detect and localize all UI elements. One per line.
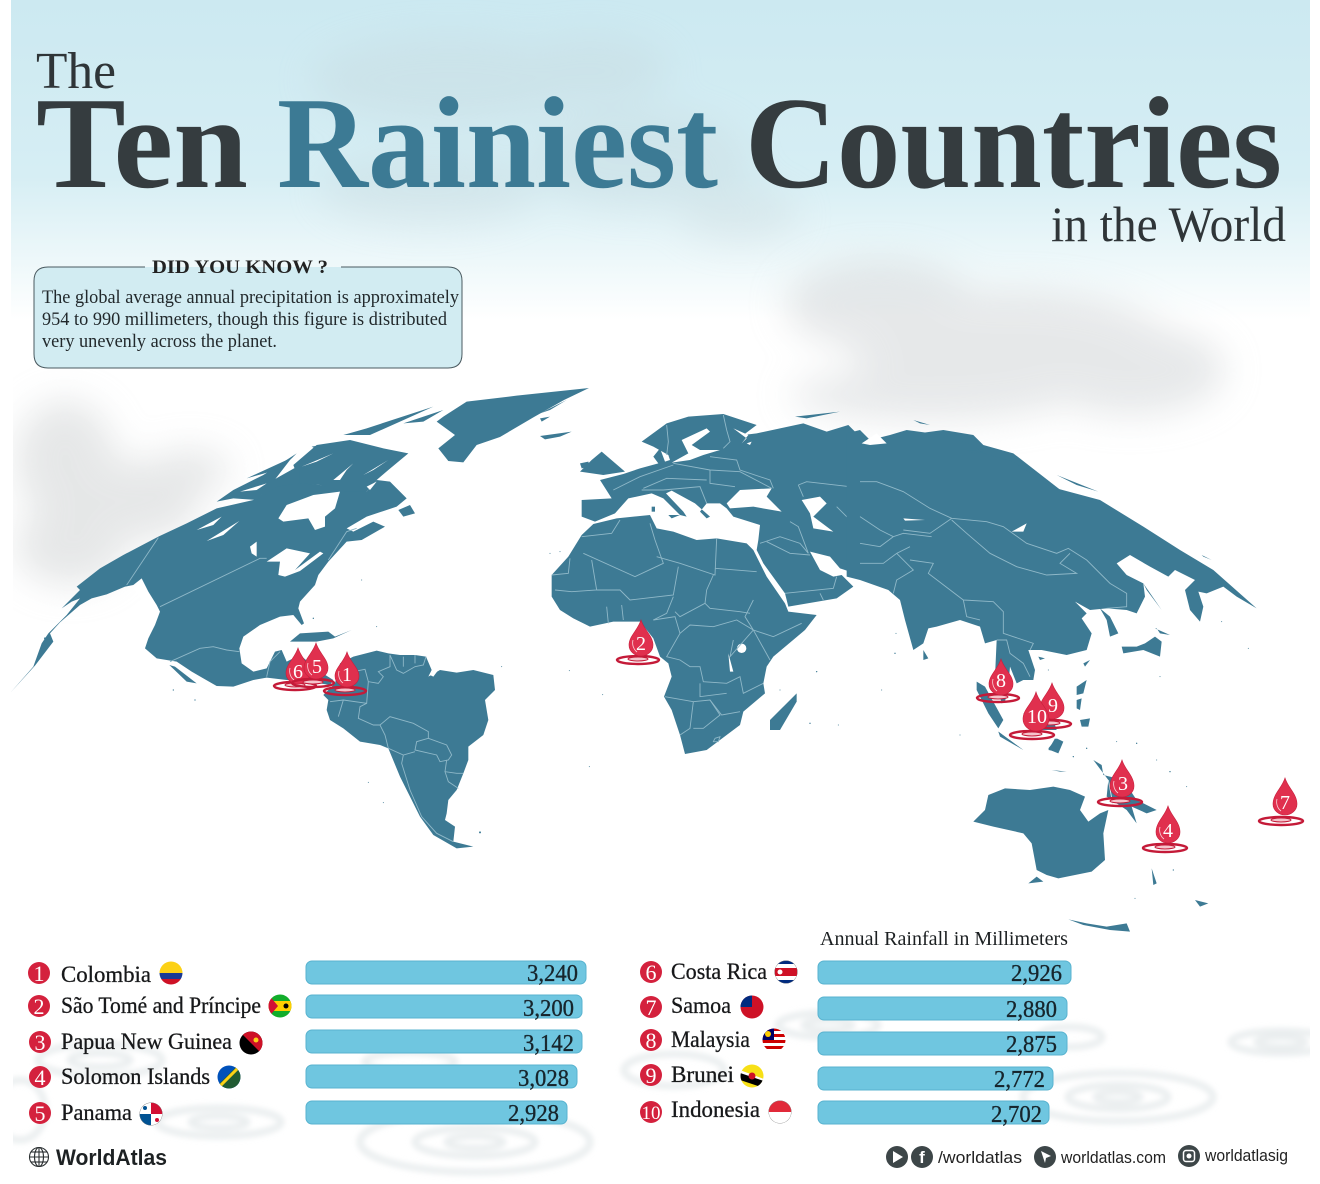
map marker 6: Costa Rica: 6 bbox=[293, 661, 303, 683]
ranking row 5: Panama: Panama bbox=[61, 1100, 132, 1125]
map: South America bbox=[323, 651, 502, 848]
ranking row 9: Brunei: 9 bbox=[646, 1063, 656, 1088]
icon: instagram bbox=[1178, 1145, 1200, 1167]
ranking row 5: Panama bbox=[29, 1100, 567, 1127]
title: Countries bbox=[745, 71, 1282, 216]
ranking row 10: Indonesia: 10 bbox=[642, 1103, 660, 1124]
map marker 2: São Tomé and Príncipe: 2 bbox=[636, 633, 646, 655]
ranking row 4: Solomon Islands bbox=[29, 1064, 577, 1092]
ranking row 10: Indonesia: Indonesia bbox=[671, 1097, 760, 1122]
ranking row 4: Solomon Islands: 3,028 bbox=[518, 1065, 569, 1092]
ranking row 5: Panama: 2,928 bbox=[508, 1100, 559, 1127]
ranking row 8: Malaysia: 8 bbox=[646, 1028, 656, 1053]
ranking row 3: Papua New Guinea: 3,142 bbox=[523, 1030, 574, 1057]
ranking row 10: Indonesia: 2,702 bbox=[991, 1101, 1042, 1128]
icon: facebook: f bbox=[919, 1148, 925, 1167]
map marker 3: Papua New Guinea: 3 bbox=[1118, 773, 1128, 795]
ranking row 9: Brunei bbox=[640, 1064, 1054, 1091]
icon: facebook bbox=[911, 1146, 933, 1168]
ranking row 1: Colombia bbox=[28, 960, 586, 987]
ranking row 3: Papua New Guinea bbox=[29, 1029, 582, 1057]
callout: did you know: DID YOU KNOW ? bbox=[152, 257, 328, 278]
ranking row 7: Samoa: 7 bbox=[646, 995, 656, 1020]
clouds bbox=[15, 35, 1225, 585]
map marker 9: Brunei bbox=[1029, 683, 1071, 728]
ranking row 6: Costa Rica bbox=[640, 959, 1071, 987]
callout: did you know bbox=[34, 257, 462, 368]
title: Ten bbox=[36, 71, 248, 216]
map marker 10: Indonesia: 10 bbox=[1027, 706, 1047, 728]
ranking row 8: Malaysia: 2,875 bbox=[1006, 1031, 1057, 1058]
ranking row 8: Malaysia bbox=[640, 1028, 1068, 1056]
social links: worldatlas.com bbox=[1060, 1149, 1166, 1167]
map marker 1: Colombia bbox=[324, 652, 366, 695]
world map bbox=[11, 388, 1303, 932]
callout: did you know: The global average annual precipitation is approximately bbox=[42, 288, 460, 308]
logo: WorldAtlas: WorldAtlas bbox=[56, 1145, 167, 1170]
ranking row 5: Panama: 5 bbox=[34, 1101, 46, 1126]
map: Europe, Africa and West Asia bbox=[540, 400, 1073, 767]
ranking row 4: Solomon Islands: 4 bbox=[34, 1065, 46, 1090]
map marker 7: Samoa: 7 bbox=[1280, 792, 1290, 814]
map marker 4: Solomon Islands: 4 bbox=[1163, 820, 1173, 842]
title: Rainiest bbox=[277, 71, 718, 216]
callout: did you know: very unevenly across the planet. bbox=[42, 332, 277, 352]
map marker 3: Papua New Guinea bbox=[1098, 760, 1142, 806]
social links: worldatlasig bbox=[1204, 1147, 1288, 1165]
title bbox=[36, 43, 1286, 252]
ranking row 6: Costa Rica: 6 bbox=[646, 960, 656, 985]
icon: website cursor bbox=[1034, 1146, 1056, 1168]
map marker 10: Indonesia bbox=[1010, 692, 1054, 739]
ranking row 1: Colombia: 1 bbox=[34, 961, 44, 986]
ranking row 2: São Tomé and Príncipe: São Tomé and Príncipe bbox=[61, 993, 261, 1018]
ranking row 3: Papua New Guinea: 3 bbox=[34, 1030, 46, 1055]
ranking row 4: Solomon Islands: Solomon Islands bbox=[61, 1064, 210, 1089]
title: The bbox=[36, 43, 116, 100]
ranking row 6: Costa Rica: Costa Rica bbox=[671, 959, 767, 984]
ranking row 10: Indonesia bbox=[640, 1097, 1049, 1128]
map marker 7: Samoa bbox=[1259, 778, 1303, 825]
title: in the World bbox=[1051, 196, 1286, 252]
social links: /worldatlas bbox=[938, 1149, 1022, 1167]
map marker 8: Malaysia: 8 bbox=[996, 670, 1006, 692]
ranking row 9: Brunei: Brunei bbox=[671, 1062, 734, 1087]
ranking row 2: São Tomé and Príncipe: 2 bbox=[34, 994, 44, 1019]
ranking row 6: Costa Rica: 2,926 bbox=[1011, 960, 1062, 987]
rain ripples bbox=[0, 1013, 1320, 1172]
map marker 4: Solomon Islands bbox=[1143, 806, 1187, 852]
map marker 9: Brunei: 9 bbox=[1048, 695, 1058, 717]
ranking row 7: Samoa bbox=[640, 996, 1068, 1021]
map: Oceania bbox=[973, 732, 1208, 932]
icon: video bbox=[886, 1146, 908, 1168]
ranking row 9: Brunei: 2,772 bbox=[994, 1066, 1045, 1093]
map marker 2: São Tomé and Príncipe bbox=[617, 620, 659, 664]
background sky bbox=[11, 0, 1310, 320]
map marker 6: Costa Rica bbox=[274, 648, 316, 690]
chart heading: Annual Rainfall in Millimeters bbox=[820, 928, 1068, 950]
ranking row 7: Samoa: 2,880 bbox=[1006, 996, 1057, 1023]
map: Central and East Asia bbox=[847, 420, 1257, 753]
map marker 1: Colombia: 1 bbox=[342, 664, 352, 686]
ranking row 1: Colombia: 3,240 bbox=[527, 960, 578, 987]
ranking row 7: Samoa: Samoa bbox=[671, 993, 731, 1018]
social links bbox=[886, 1145, 1288, 1168]
map marker 5: Panama bbox=[292, 643, 334, 687]
ranking row 8: Malaysia: Malaysia bbox=[671, 1027, 750, 1052]
ranking row 2: São Tomé and Príncipe bbox=[28, 994, 582, 1020]
map marker 8: Malaysia bbox=[977, 659, 1019, 702]
ranking row 3: Papua New Guinea: Papua New Guinea bbox=[61, 1029, 232, 1054]
callout: did you know: 954 to 990 millimeters, though this figure is distributed bbox=[42, 310, 448, 330]
ranking row 2: São Tomé and Príncipe: 3,200 bbox=[523, 995, 574, 1022]
map marker 5: Panama: 5 bbox=[312, 656, 322, 678]
ranking row 1: Colombia: Colombia bbox=[61, 962, 151, 987]
map: North America and Greenland bbox=[11, 388, 589, 701]
